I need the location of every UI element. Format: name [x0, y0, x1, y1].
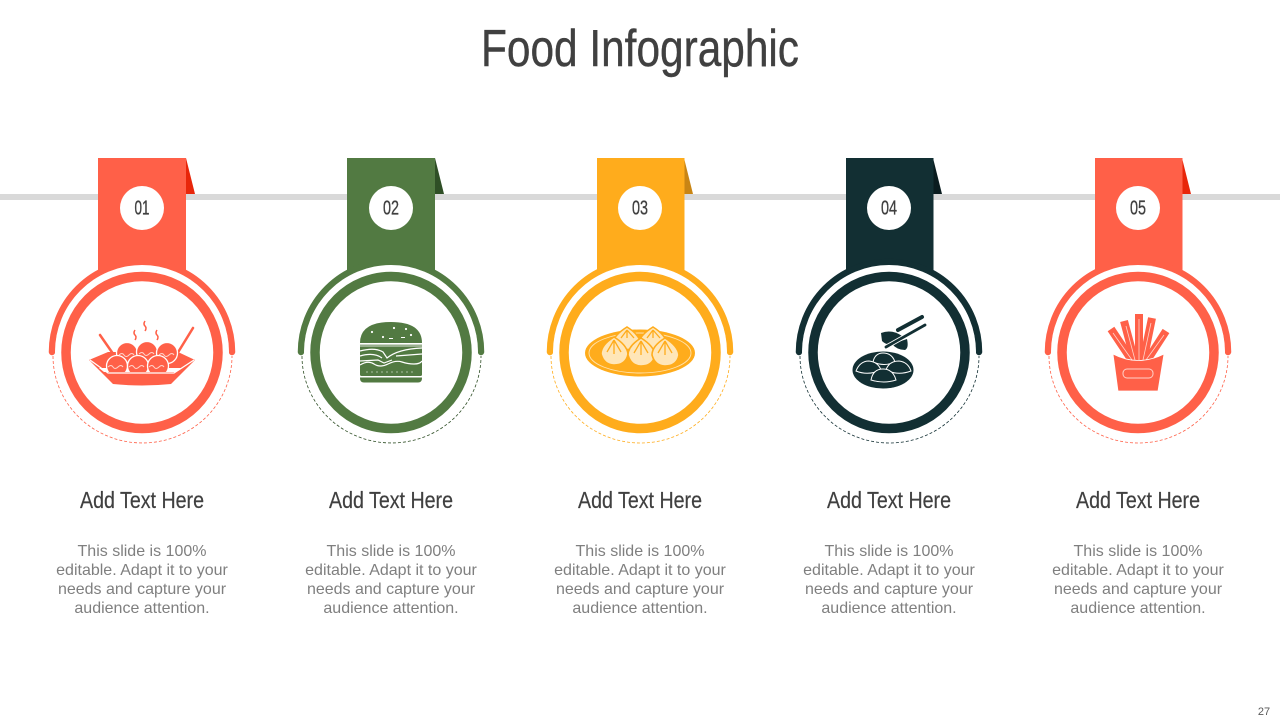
- panel: item 03: [550, 158, 730, 617]
- body text 01: needs and capture your: [58, 581, 227, 598]
- body text 01: This slide is 100%: [78, 543, 206, 560]
- body text 02: needs and capture your: [307, 581, 476, 598]
- body text 05: needs and capture your: [1054, 581, 1223, 598]
- body text 03: editable. Adapt it to your: [554, 562, 727, 579]
- panel: item 05: [1048, 158, 1228, 617]
- number badge 03: 03: [632, 198, 648, 220]
- icon: takoyaki bowl: [89, 321, 195, 386]
- rings 05: [1048, 262, 1228, 443]
- heading 01: Add Text Here: [80, 487, 204, 513]
- page number: 27: [1258, 706, 1270, 718]
- number badge 03: [618, 186, 662, 230]
- rings 02: [301, 262, 481, 443]
- icon: french fries: [1111, 314, 1166, 391]
- rings 03: [550, 262, 730, 443]
- rings 01: [52, 262, 232, 443]
- number badge 04: 04: [881, 198, 897, 220]
- body text 05: editable. Adapt it to your: [1052, 562, 1225, 579]
- rings 04: [799, 262, 979, 443]
- body text 03: This slide is 100%: [576, 543, 704, 560]
- body text 04: needs and capture your: [805, 581, 974, 598]
- number badge 05: 05: [1130, 198, 1146, 220]
- icon: dumpling plate: [585, 327, 695, 376]
- body text 02: audience attention.: [323, 600, 459, 617]
- ribbon 02: [347, 158, 444, 283]
- heading 05: Add Text Here: [1076, 487, 1200, 513]
- body text 02: This slide is 100%: [327, 543, 455, 560]
- body text 04: This slide is 100%: [825, 543, 953, 560]
- ribbon 04: [846, 158, 942, 283]
- panel: item 02: [301, 158, 481, 617]
- panel: item 04: [799, 158, 979, 617]
- body text 01: editable. Adapt it to your: [56, 562, 229, 579]
- body text 04: audience attention.: [821, 600, 957, 617]
- number badge 04: [867, 186, 911, 230]
- body text 01: audience attention.: [74, 600, 210, 617]
- icon: burger: [360, 322, 422, 382]
- ribbon 05: [1095, 158, 1191, 283]
- number badge 02: 02: [383, 198, 399, 220]
- panel: item 01: [52, 158, 232, 617]
- title: Food Infographic: [481, 20, 799, 78]
- number badge 05: [1116, 186, 1160, 230]
- number badge 01: [120, 186, 164, 230]
- body text 03: audience attention.: [572, 600, 708, 617]
- heading 03: Add Text Here: [578, 487, 702, 513]
- ribbon 01: [98, 158, 195, 283]
- icon: gyoza and chopsticks: [852, 317, 925, 388]
- heading 04: Add Text Here: [827, 487, 951, 513]
- number badge 02: [369, 186, 413, 230]
- body text 04: editable. Adapt it to your: [803, 562, 976, 579]
- number badge 01: 01: [134, 198, 150, 220]
- body text 03: needs and capture your: [556, 581, 725, 598]
- body text 05: This slide is 100%: [1074, 543, 1202, 560]
- ribbon 03: [597, 158, 693, 283]
- heading 02: Add Text Here: [329, 487, 453, 513]
- body text 02: editable. Adapt it to your: [305, 562, 478, 579]
- body text 05: audience attention.: [1070, 600, 1206, 617]
